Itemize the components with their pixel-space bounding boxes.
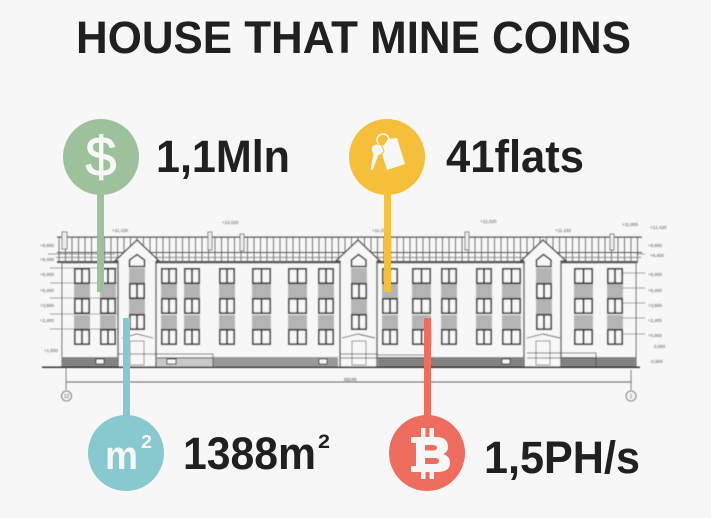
title: HOUSE THAT MINE COINS (76, 12, 631, 63)
elevation labels: +11,150 (112, 228, 129, 233)
elevation labels: +2,400 (648, 318, 662, 323)
elevation labels: +8,400 (40, 257, 54, 262)
elevation guide lines (48, 254, 645, 334)
stat: price: 1,1Mln (156, 131, 290, 182)
elevation labels: +12,020 (222, 220, 239, 225)
elevation labels: +0,900 (648, 333, 662, 338)
elevation labels: +6,900 (40, 272, 54, 277)
pin: flats (349, 119, 425, 292)
stat: flats: 41flats (446, 131, 584, 182)
elevation labels: +9,800 (648, 243, 662, 248)
elevation labels: -0,900 (650, 359, 663, 364)
dimension line (62, 368, 636, 401)
elevation labels: +3,900 (648, 303, 662, 308)
elevation labels: +1,500 (44, 348, 58, 353)
icon: square metres: m (105, 434, 138, 478)
pin: area (88, 318, 164, 491)
elevation labels: +11,800 (622, 222, 639, 227)
building elevation drawing (40, 219, 667, 401)
elevation labels: +9,800 (40, 243, 54, 248)
elevation labels: +5,400 (40, 288, 54, 293)
icon: keys and tag (370, 134, 405, 171)
dimension line: 12 (64, 394, 69, 400)
facade wall (62, 263, 636, 367)
ground line (42, 366, 640, 368)
dimension line: 55245 (344, 377, 357, 382)
stat: hash rate: 1,5PH/s (484, 432, 640, 483)
gable bay centre (336, 240, 380, 367)
elevation labels: +11,150 (372, 228, 389, 233)
elevation labels: +3,900 (40, 303, 54, 308)
icon: square metres: 2 (141, 432, 152, 452)
pin: price (63, 119, 139, 292)
elevation labels: +11,150 (555, 228, 572, 233)
icon: dollar: $ (85, 125, 117, 188)
elevation labels: +2,400 (40, 318, 54, 323)
dimension line: 1 (630, 394, 633, 400)
gable bay right (521, 240, 566, 367)
pin: hash rate (389, 318, 465, 491)
elevation labels: +6,900 (648, 272, 662, 277)
roof (56, 232, 642, 263)
elevation labels: +5,400 (648, 288, 662, 293)
plinth and ramps (62, 353, 636, 367)
elevation labels: +12,420 (650, 225, 667, 230)
windows (75, 269, 622, 344)
elevation labels: 0,000 (654, 344, 666, 349)
stat: area: 1388m (183, 428, 316, 479)
stipple panels (74, 284, 623, 329)
icon: bitcoin (411, 428, 450, 479)
stat: area: 2 (318, 432, 330, 453)
elevation labels: +8,400 (650, 253, 664, 258)
gable bay left (115, 240, 159, 367)
elevation labels: +12,020 (480, 219, 497, 224)
elevation labels (40, 219, 667, 364)
